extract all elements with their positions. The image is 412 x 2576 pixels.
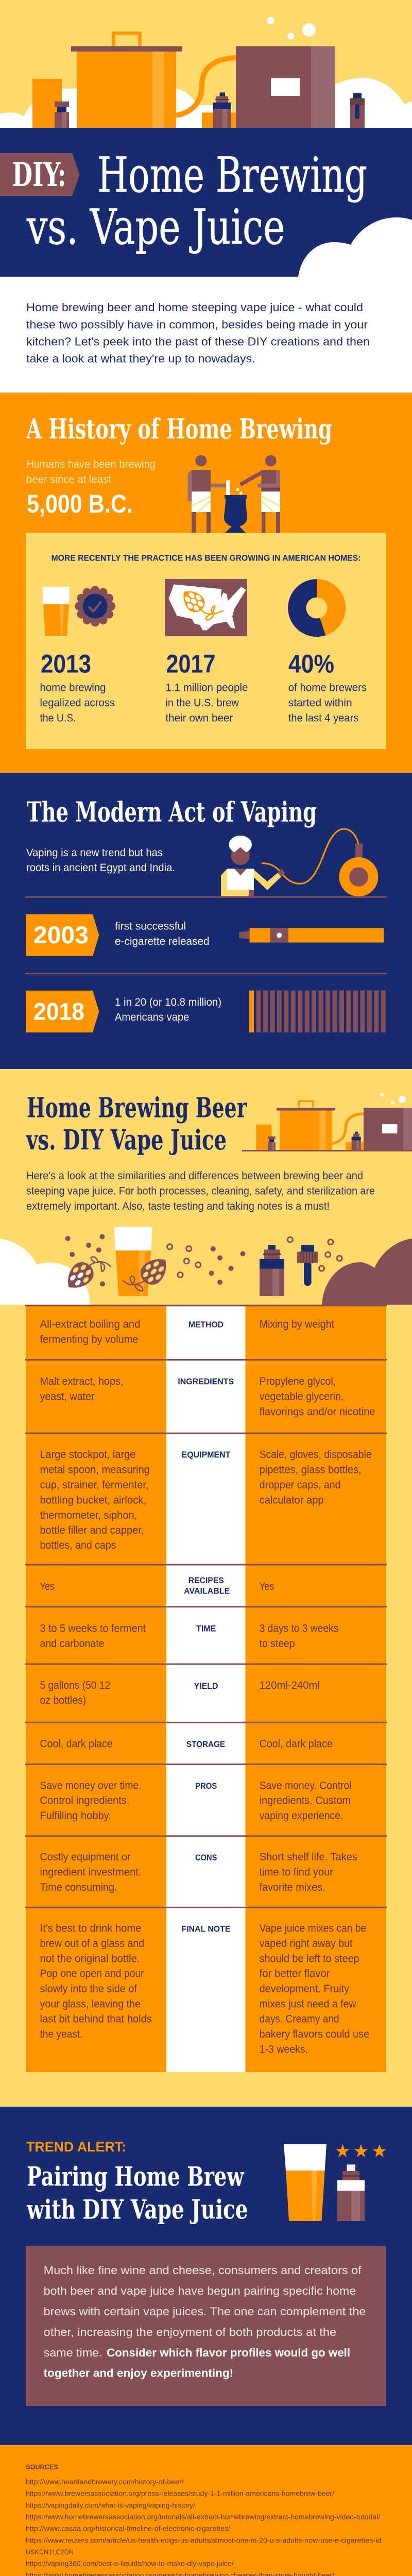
row: final note: FINAL NOTE	[182, 1924, 230, 1934]
stat: 2013	[40, 649, 115, 724]
row: ingredients	[40, 1376, 375, 1418]
row: ingredients: INGREDIENTS	[178, 1377, 234, 1386]
text block: source list	[26, 2478, 381, 2576]
panel: pairing text: other, increasing the enjoyment of both products at the	[44, 2326, 336, 2338]
row: time: TIME	[196, 1624, 216, 1633]
row: equipment: pipettes, glass bottles,	[260, 1464, 362, 1476]
icon: hookah	[339, 844, 378, 896]
row: final note: mixes just need a few	[260, 1998, 356, 2010]
row: final note: for better flavor	[260, 1968, 330, 1980]
icon: left white cloud	[0, 1239, 90, 1305]
text block: comparison intro	[26, 1170, 375, 1212]
row: cons	[40, 1851, 357, 1893]
row: equipment: cup, strainer, fermenter,	[40, 1479, 148, 1491]
stat: 40 percent: started within	[288, 697, 352, 709]
icon: hookah smoker	[221, 829, 358, 896]
row: time	[40, 1622, 338, 1650]
row: final note: days. Creamy and	[260, 2013, 339, 2025]
text block: ancient roots	[26, 847, 175, 874]
row: final note: It's best to drink home	[40, 1923, 141, 1935]
heading	[26, 1092, 247, 1156]
chart: 1 in 20 pictogram bars	[249, 991, 386, 1032]
icon: steam bubbles	[267, 17, 316, 39]
text block: 1 in 20 vape: Americans vape	[115, 1011, 189, 1023]
text block: introduction: Home brewing beer and home steeping vape juice - what could	[26, 301, 363, 314]
row: method: Mixing by weight	[260, 1318, 334, 1330]
row: storage: STORAGE	[186, 1739, 225, 1749]
row: cons: Time consuming.	[40, 1882, 117, 1893]
text block: source list: https://www.homebrewersassociation.org/tutorials/all-extract-homebrewing/extract-homebrewing-video-tutorial/	[26, 2513, 380, 2521]
panel: pairing text: same time.	[44, 2346, 102, 2359]
stat: 2017: 2017	[166, 649, 215, 678]
row: recipes available: Yes	[260, 1581, 274, 1592]
icon: left brewer	[188, 455, 226, 533]
row: equipment: calculator app	[260, 1494, 324, 1506]
text block: comparison intro: extremely important. Also, taste testing and taking notes is a must!	[26, 1200, 330, 1212]
text block: since 5000 BC: 5,000 B.C.	[27, 489, 133, 518]
row: pros: Save money. Control	[260, 1780, 352, 1791]
row: cons: time to find your	[260, 1867, 333, 1878]
row: equipment: metal spoon, measuring	[40, 1464, 150, 1476]
tag: 2018	[26, 991, 99, 1032]
text block: 1 in 20 vape: 1 in 20 (or 10.8 million)	[115, 996, 221, 1008]
row: recipes available: Yes	[40, 1581, 55, 1592]
stat: 2017: their own beer	[165, 712, 233, 724]
icon: scattered dots	[65, 1234, 245, 1286]
row: yield: oz bottles)	[40, 1694, 86, 1706]
text block: ancient roots: Vaping is a new trend but has	[26, 847, 163, 859]
text block: comparison intro: steeping vape juice. For both processes, cleaning, safety, and sterilization are	[26, 1184, 375, 1197]
row: final note	[40, 1923, 369, 2055]
icon: e-cigarette	[239, 928, 384, 942]
icon: donut chart 40 percent	[288, 579, 346, 637]
icon: right hop	[123, 1252, 174, 1291]
icon: juice bottle	[337, 2164, 365, 2221]
panel: pairing text: both beer and vape juice have begun pairing specific home	[44, 2284, 356, 2297]
icon: beer glass with hops	[61, 1227, 174, 1296]
heading: sources: SOURCES	[26, 2463, 58, 2471]
icon: right brewer	[239, 455, 281, 533]
row: final note: not the original bottle.	[40, 1953, 140, 1964]
text block: first e-cigarette: e-cigarette released	[115, 936, 210, 947]
row: pros: ingredients. Custom	[260, 1794, 351, 1806]
heading: vs. DIY Vape Juice	[26, 1124, 227, 1156]
text block: source list: http://www.casaa.org/historical-timeline-of-electronic-cigarettes/	[26, 2524, 230, 2533]
text block: 1 in 20 vape	[115, 996, 221, 1023]
row: cons: Short shelf life. Takes	[260, 1851, 357, 1863]
row: equipment: EQUIPMENT	[182, 1450, 231, 1460]
row: final note: brew out of a glass and	[40, 1938, 144, 1950]
tag: DIY: DIY:	[12, 156, 66, 194]
row: equipment	[40, 1449, 372, 1551]
row: pros: Save money over time.	[40, 1780, 141, 1791]
row: storage: Cool, dark place	[40, 1738, 113, 1750]
panel: pairing text: Much like fine wine and cheese, consumers and creators of	[44, 2264, 362, 2277]
text block: introduction	[0, 277, 412, 393]
row: equipment: Scale, gloves, disposable	[260, 1449, 372, 1461]
row: final note: the yeast.	[40, 2028, 82, 2040]
tag: 2018: 2018	[33, 997, 84, 1025]
row: final note: Vape juice mixes can be	[260, 1923, 366, 1935]
row: final note: Pop one open and pour	[40, 1968, 144, 1980]
icon: three stars	[336, 2144, 386, 2157]
title: vs. Vape Juice	[26, 199, 285, 256]
panel: pairing text	[26, 2246, 386, 2406]
row: recipes available: AVAILABLE	[184, 1586, 230, 1596]
icon: stirring paddle	[226, 480, 230, 495]
icon: left vial	[55, 101, 69, 128]
stat: 40 percent	[288, 649, 367, 724]
panel: pairing text: brews with certain vape juices. The one can complement the	[44, 2305, 366, 2318]
panel: recent growth stats	[26, 533, 386, 749]
icon: mini brewing equipment	[256, 1093, 412, 1150]
row: pros: PROS	[195, 1781, 217, 1791]
text block: introduction: these two possibly have in common, besides being made in your	[26, 318, 368, 331]
row: pros: Fulfilling hobby.	[40, 1810, 111, 1822]
text block: since 5000 BC: Humans have been brewing	[26, 459, 156, 470]
panel: sources	[0, 2445, 412, 2576]
panel: comparison table	[25, 1304, 387, 2072]
row: cons: favorite mixes.	[260, 1882, 325, 1893]
row: cons: CONS	[195, 1853, 217, 1862]
heading: Pairing Home Brew	[27, 2162, 244, 2193]
panel: comparison section	[0, 1069, 412, 2107]
tag: DIY	[0, 153, 80, 196]
panel: pairing text: together and enjoy experimenting!	[44, 2367, 233, 2380]
row: pros: Control ingredients.	[40, 1794, 130, 1806]
icon: left hop	[61, 1257, 111, 1295]
row: ingredients: Propylene glycol,	[260, 1376, 336, 1387]
stat: 40 percent: the last 4 years	[288, 712, 358, 724]
icon: beer glass	[284, 2144, 327, 2221]
row: yield: 5 gallons (50 12	[40, 1680, 110, 1691]
text block: first e-cigarette: first successful	[115, 920, 186, 933]
icon: white clouds	[0, 78, 412, 128]
row: yield: YIELD	[194, 1681, 218, 1691]
stat: 40 percent: 40%	[288, 649, 334, 678]
icon: middle bottle	[213, 93, 231, 128]
row: ingredients: Malt extract, hops,	[40, 1376, 124, 1387]
icon: scattered rings	[167, 1237, 342, 1278]
text block: source list: https://vaping360.com/best-e-liquids/how-to-make-diy-vape-juice/	[26, 2560, 234, 2568]
stat: 2013: home brewing	[40, 682, 106, 694]
stat: 2017: in the U.S. brew	[165, 697, 239, 709]
row: equipment: thermometer, siphon,	[40, 1510, 137, 1521]
row: pros	[40, 1780, 352, 1822]
panel: hero illustration	[0, 0, 412, 128]
row: final note: bakery flavors could use	[260, 2028, 369, 2040]
title	[26, 147, 367, 256]
heading	[26, 2162, 248, 2226]
row: time: to steep	[260, 1638, 295, 1650]
row: ingredients: vegetable glycerin,	[260, 1391, 344, 1402]
row: final note: last bit behind that holds	[40, 2013, 152, 2025]
row: final note: vaped right away but	[260, 1938, 353, 1950]
icon: dropper	[297, 1245, 318, 1286]
row: time: 3 days to 3 weeks	[260, 1622, 338, 1634]
stat: 40 percent: of home brewers	[288, 682, 367, 694]
text block: comparison intro: Here's a look at the similarities and differences between brewing beer and	[26, 1170, 363, 1182]
row: equipment: bottles, and caps	[40, 1539, 116, 1551]
row: cons: ingredient investment.	[40, 1867, 141, 1878]
text block: since 5000 BC	[26, 459, 156, 518]
label: trend alert: TREND ALERT:	[26, 2139, 126, 2155]
text block: since 5000 BC: beer since at least	[26, 474, 111, 485]
row: method	[40, 1318, 334, 1346]
text block: source list: https://www.brewersassociation.org/press-releases/study-1-1-million-americans-homebrew-beer/	[26, 2489, 334, 2498]
icon: right dropper bottle	[350, 93, 365, 128]
icon: beer glass	[43, 587, 70, 636]
row: storage	[40, 1738, 333, 1750]
panel: pairing text: Consider which flavor profiles would go well	[107, 2346, 350, 2359]
row: recipes available	[40, 1575, 274, 1596]
stat: 2013: the U.S.	[40, 712, 76, 724]
icon: banner cloud	[298, 217, 412, 277]
row: storage: Cool, dark place	[260, 1738, 333, 1750]
tag: 2003: 2003	[33, 921, 89, 948]
row: time: and carbonate	[40, 1638, 104, 1650]
row: final note: your glass, leaving the	[40, 1998, 141, 2010]
text block: source list: USKCN1LC2DN	[26, 2548, 74, 2556]
text block: first e-cigarette	[115, 920, 210, 947]
row: final note: 1-3 weeks.	[260, 2043, 308, 2055]
row: method: METHOD	[188, 1319, 224, 1329]
panel: history of home brewing	[0, 393, 412, 773]
heading: Home Brewing Beer	[27, 1092, 247, 1124]
text block: source list: https://www.reuters.com/article/us-health-ecigs-us-adults/almost-one-in-20-u-s-adults-now-use-e-cigarettes-id	[26, 2536, 381, 2544]
text block: source list: http://www.heartlandbrewery.com/history-of-beer/	[26, 2478, 184, 2486]
icon: right brown cloud	[322, 1239, 412, 1305]
icon: approval badge	[75, 586, 115, 626]
row: ingredients: flavorings and/or nicotine	[260, 1406, 375, 1418]
text block: source list: https://vapingdaily.com/what-is-vaping/vaping-history/	[26, 2501, 195, 2509]
row: yield: 120ml-240ml	[260, 1680, 320, 1691]
row: pros: vaping experience.	[260, 1810, 343, 1822]
row: equipment: Large stockpot, large	[40, 1449, 135, 1461]
icon: juice bottle	[260, 1245, 284, 1296]
icon: cauldron	[224, 488, 247, 533]
row: cons: Costly equipment or	[40, 1851, 131, 1863]
stat: 2013: legalized across	[40, 697, 115, 709]
row: time: 3 to 5 weeks to ferment	[40, 1622, 146, 1634]
row: method: fermenting by volume	[40, 1334, 138, 1346]
row: final note: slowly into the side of	[40, 1983, 137, 1995]
text block: ancient roots: roots in ancient Egypt and India.	[26, 862, 175, 874]
text block: introduction: kitchen? Let's peek into the past of these DIY creations and then	[26, 335, 370, 348]
icon: brewing equipment	[32, 33, 335, 128]
tag: 2003	[26, 914, 99, 956]
text block: introduction: take a look at what they're up to nowadays.	[26, 352, 255, 365]
row: final note: should be left to steep	[260, 1953, 359, 1964]
row: ingredients: yeast, water	[40, 1391, 95, 1402]
row: yield	[40, 1680, 320, 1706]
row: equipment: bottling bucket, airlock,	[40, 1494, 146, 1506]
row: equipment: bottle filler and capper,	[40, 1524, 144, 1536]
row: equipment: dropper caps, and	[260, 1479, 341, 1491]
row: final note: development. Fruity	[260, 1983, 350, 1995]
panel: title banner	[0, 128, 412, 277]
stat: 2017	[165, 649, 248, 724]
subheading: MORE RECENTLY THE PRACTICE HAS BEEN GROWING IN AMERICAN HOMES:	[52, 553, 360, 563]
panel: trend alert	[0, 2107, 412, 2445]
icon: US map with hop	[165, 579, 247, 636]
panel: modern act of vaping	[0, 773, 412, 1069]
row: recipes available: RECIPES	[188, 1575, 224, 1585]
stat: 2017: 1.1 million people	[165, 682, 248, 694]
row: method: All-extract boiling and	[40, 1318, 140, 1330]
heading: with DIY Vape Juice	[26, 2195, 248, 2226]
stat: 2013: 2013	[41, 649, 91, 678]
